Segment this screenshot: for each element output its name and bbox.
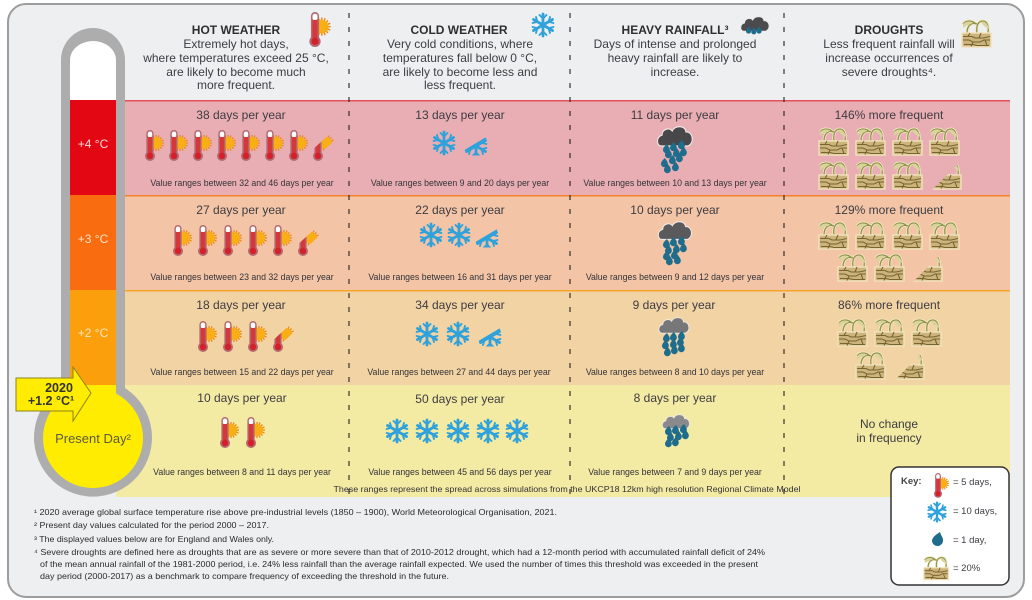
cold weather data, +2 °C: Value ranges between 27 and 44 days per year <box>367 367 551 377</box>
key <box>891 467 1009 585</box>
footnotes: ² Present day values calculated for the period 2000 – 2017. <box>34 521 269 530</box>
pictogram: cloud with 8 drops <box>662 415 690 447</box>
rainfall data, present day: Value ranges between 7 and 9 days per year <box>588 467 762 477</box>
column header: heavy rainfall <box>594 17 769 79</box>
hot weather data, +3 °C: Value ranges between 23 and 32 days per year <box>150 272 334 282</box>
thermometer empty top <box>70 41 116 100</box>
column header: droughts: DROUGHTS <box>855 23 923 37</box>
column header: droughts: increase occurrences of <box>825 51 953 65</box>
pictogram: 5 snowflakes <box>387 420 527 442</box>
column header: heavy rainfall: Days of intense and prolonged <box>594 37 756 51</box>
key: thermometer: = 5 days, <box>953 477 992 488</box>
footnotes: of the mean annual rainfall of the 1981-2000 period, i.e. 24% less rainfall than the average rainfall expected. We used the number of times this threshold was exceeded in the present <box>40 560 759 569</box>
rainfall data, +3 °C <box>586 203 764 282</box>
column header: hot weather: Extremely hot days, <box>183 37 289 51</box>
drought data, +4 °C <box>819 108 961 189</box>
pictogram: 7.3 drought icons <box>819 129 961 189</box>
thermometer section +3 °C <box>70 195 116 290</box>
column header: heavy rainfall: HEAVY RAINFALL³ <box>622 23 728 37</box>
key: raindrop: = 1 day, <box>953 535 986 546</box>
column header: droughts: severe droughts⁴. <box>842 65 936 79</box>
model range note: These ranges represent the spread across simulations from the UKCP18 12km high resolution Regional Climate Model <box>334 485 801 494</box>
drought data, present day: in frequency <box>856 431 922 445</box>
label +2 °C: +2 °C <box>78 326 109 340</box>
column header: hot weather <box>142 12 331 92</box>
key: snowflake: = 10 days, <box>953 506 997 517</box>
rainfall data, +4 °C: Value ranges between 10 and 13 days per year <box>583 178 767 188</box>
icon: snowflake <box>533 14 553 36</box>
hot weather data, present day: Value ranges between 8 and 11 days per year <box>153 467 331 477</box>
hot weather data, +4 °C: Value ranges between 32 and 46 days per year <box>150 178 334 188</box>
rainfall data, present day: 8 days per year <box>634 391 716 405</box>
panel: warming row +3 °C <box>70 195 1010 290</box>
arrow: 2020 +1.2 °C: 2020 <box>45 381 73 395</box>
column header: hot weather: where temperatures exceed 25 °C, <box>142 51 329 65</box>
footnotes: ¹ 2020 average global surface temperature rise above pre-industrial levels (1850 – 1900), World Meteorological Organisation, 2021. <box>34 508 557 517</box>
column header: cold weather <box>383 14 553 92</box>
icon: thermometer and sun <box>309 12 331 47</box>
cold weather data, +4 °C <box>371 108 549 188</box>
cold weather data, +4 °C: Value ranges between 9 and 20 days per year <box>371 178 549 188</box>
cold weather data, +3 °C <box>368 203 552 282</box>
column header: cold weather: are likely to become less and <box>383 65 537 79</box>
hot weather data, +2 °C: 18 days per year <box>196 298 286 312</box>
column header: cold weather: temperatures fall below 0 °C, <box>383 51 537 65</box>
pictogram: 6.5 drought icons <box>819 223 959 281</box>
thermometer section +4 °C <box>70 100 116 195</box>
column header: cold weather: COLD WEATHER <box>410 23 508 37</box>
column header: droughts: Less frequent rainfall will <box>823 37 955 51</box>
column header: hot weather: more frequent. <box>197 78 275 92</box>
hot weather data, +3 °C <box>150 203 334 282</box>
pictogram: 3.6 thermometers <box>198 321 294 352</box>
cold weather data, +2 °C: 34 days per year <box>415 298 505 312</box>
rainfall data, present day <box>588 391 762 477</box>
rainfall data, +4 °C <box>583 108 767 188</box>
column header: heavy rainfall: increase. <box>651 65 699 79</box>
cold weather data, +2 °C <box>367 298 551 377</box>
rainfall data, +2 °C <box>586 298 764 377</box>
column header: hot weather: HOT WEATHER <box>192 23 281 37</box>
footnotes: ⁴ Severe droughts are defined here as droughts that are as severe or more severe than that of 2010-2012 drought, which had a 12-month period with accumulated rainfall deficit of 24% <box>34 548 765 557</box>
arrow: 2020 +1.2 °C: +1.2 °C¹ <box>28 394 74 408</box>
rainfall data, +2 °C: Value ranges between 8 and 10 days per year <box>586 367 764 377</box>
label +4 °C: +4 °C <box>78 137 109 151</box>
panel: warming row +4 °C <box>70 100 1010 195</box>
hot weather data, +2 °C: Value ranges between 15 and 22 days per year <box>150 367 334 377</box>
cold weather data, +3 °C: Value ranges between 16 and 31 days per year <box>368 272 552 282</box>
label present day: Present Day² <box>55 431 132 446</box>
hot weather data, +4 °C: 38 days per year <box>196 108 286 122</box>
column header: cold weather: less frequent. <box>424 78 496 92</box>
pictogram: 2.2 snowflakes <box>421 224 497 249</box>
label +3 °C: +3 °C <box>78 232 109 246</box>
drought data, +3 °C <box>819 203 959 281</box>
column header: hot weather: are likely to become much <box>166 65 306 79</box>
pictogram: 7.6 thermometers <box>145 130 334 161</box>
pictogram: 1.3 snowflakes <box>434 132 486 157</box>
drought data, +2 °C: 86% more frequent <box>838 298 941 312</box>
hot weather data, present day: 10 days per year <box>197 391 287 405</box>
cold weather data, present day: Value ranges between 45 and 56 days per year <box>368 467 552 477</box>
pictogram: 4.3 drought icons <box>838 320 941 379</box>
footnotes: day period (2000-2017) as a benchmark to compare frequency of exceeding the threshold in the future. <box>40 572 449 581</box>
rainfall data, +2 °C: 9 days per year <box>633 298 715 312</box>
footnotes: ³ The displayed values below are for England and Wales only. <box>34 535 274 544</box>
icon: rain cloud <box>741 17 769 34</box>
rainfall data, +3 °C: 10 days per year <box>630 203 720 217</box>
thermometer section +2 °C <box>70 290 116 385</box>
panel: warming row +2 °C <box>70 290 1010 385</box>
drought data, present day: No change <box>860 417 918 431</box>
cold weather data, +4 °C: 13 days per year <box>415 108 505 122</box>
column header: heavy rainfall: heavy rainfall are likely to <box>608 51 743 65</box>
icon: drought <box>962 21 991 47</box>
key: drought: = 20% <box>953 563 981 574</box>
hot weather data, +4 °C <box>145 108 334 188</box>
pictogram: 5.4 thermometers <box>173 225 319 256</box>
drought data, +3 °C: 129% more frequent <box>835 203 944 217</box>
drought data, present day <box>856 417 922 445</box>
cold weather data, present day <box>368 392 552 477</box>
thermometer bulb <box>43 385 143 488</box>
drought data, +4 °C: 146% more frequent <box>835 108 944 122</box>
pictogram: 2 thermometers <box>220 417 265 448</box>
hot weather data, +2 °C <box>150 298 334 377</box>
cold weather data, present day: 50 days per year <box>415 392 505 406</box>
cold weather data, +3 °C: 22 days per year <box>415 203 505 217</box>
arrow: 2020 +1.2 °C <box>16 367 91 421</box>
rainfall data, +4 °C: 11 days per year <box>631 108 719 122</box>
pictogram: cloud with 10 drops <box>658 222 692 265</box>
key: Key: <box>901 476 922 487</box>
pictogram: 3.4 snowflakes <box>417 323 500 348</box>
rainfall data, +3 °C: Value ranges between 9 and 12 days per year <box>586 272 764 282</box>
thermometer graphic <box>34 28 152 497</box>
pictogram: cloud with 9 drops <box>659 318 689 356</box>
column header: cold weather: Very cold conditions, where <box>387 37 533 51</box>
drought data, +2 °C <box>838 298 941 379</box>
hot weather data, +3 °C: 27 days per year <box>196 203 286 217</box>
footnotes <box>34 508 765 581</box>
hot weather data, present day <box>153 391 331 477</box>
thermometer casing <box>34 28 152 497</box>
column header: droughts <box>823 21 991 79</box>
panel: present day row <box>116 385 1010 497</box>
pictogram: cloud with 11 drops <box>658 127 692 173</box>
